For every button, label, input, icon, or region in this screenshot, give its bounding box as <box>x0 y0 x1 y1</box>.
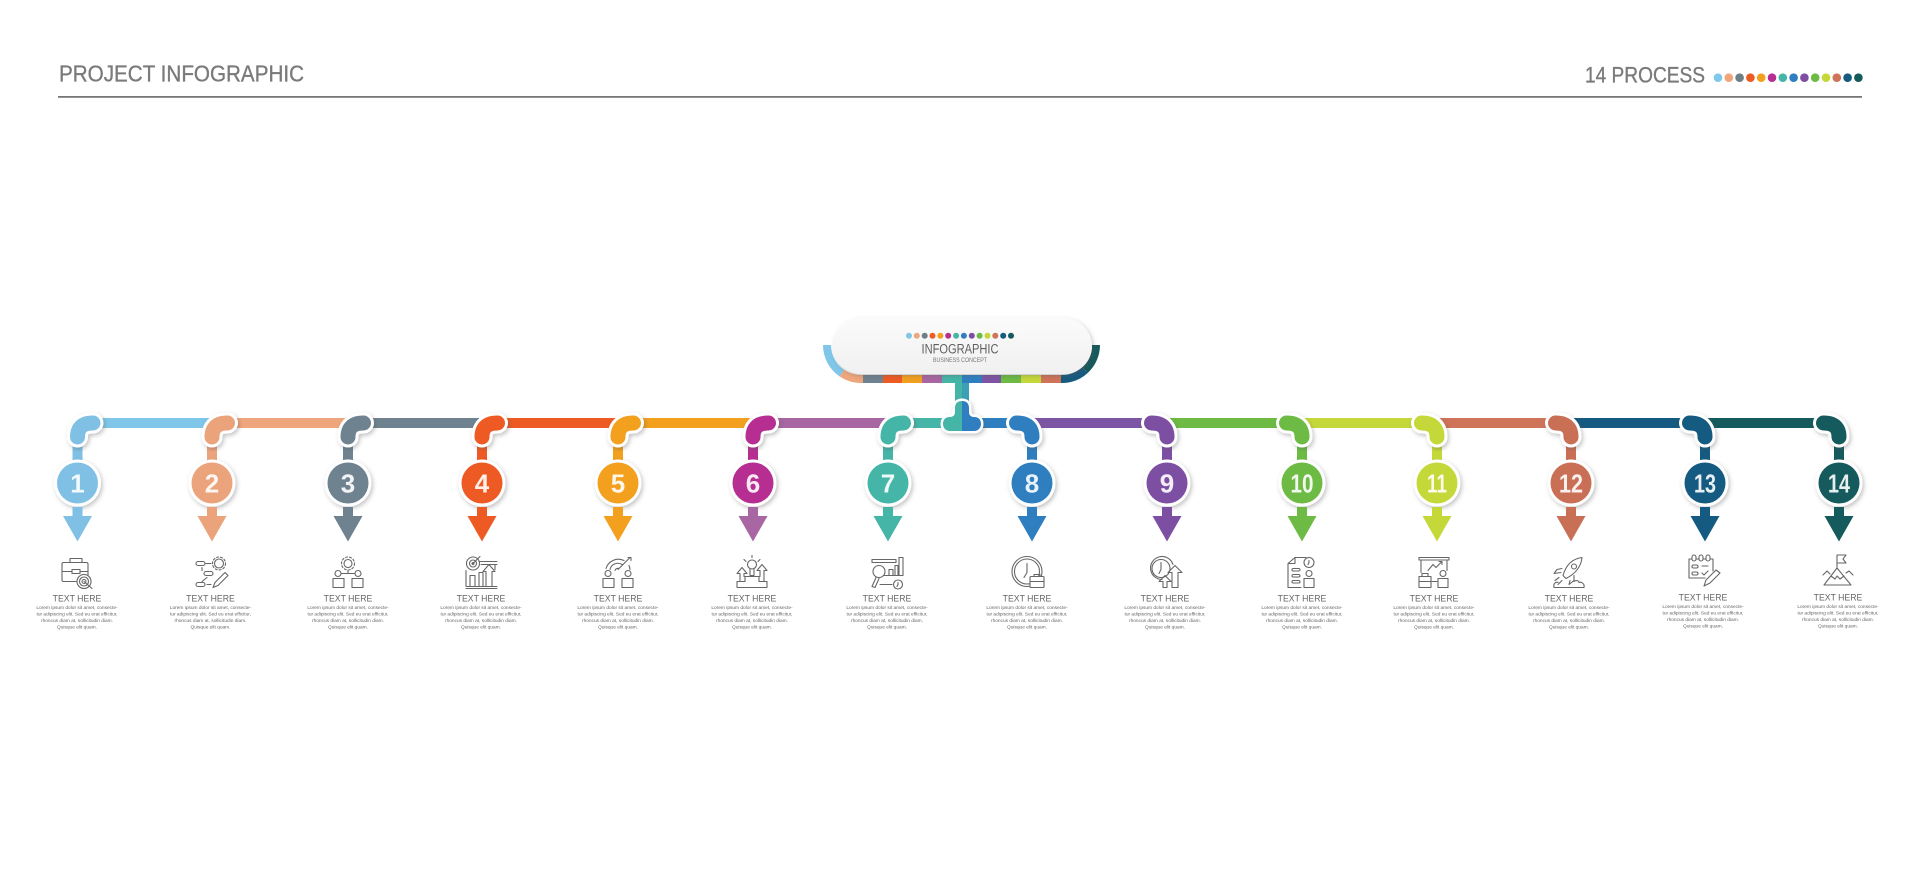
node 5 connector, badge and arrow <box>594 423 642 542</box>
node 14 connector, badge and arrow: 14 <box>1828 468 1850 498</box>
hub colour dots <box>906 333 1014 339</box>
label: TEXT HERE <box>1545 594 1593 604</box>
node 7 connector, badge and arrow: 7 <box>881 468 895 498</box>
node 2 connector, badge and arrow <box>188 423 236 542</box>
description: rhoncus diam at, sollicitudin diam. <box>991 618 1063 624</box>
description: rhoncus diam at, sollicitudin diam. <box>1266 618 1338 624</box>
icon: rocket <box>1554 558 1584 588</box>
description: rhoncus diam at, sollicitudin diam. <box>582 618 654 624</box>
description: Quisque elit quam. <box>598 624 638 630</box>
node 11 connector, badge and arrow: 11 <box>1427 468 1447 498</box>
description: tur adipiscing elit. Sed eu erat efficitur, <box>170 612 251 618</box>
node 14 connector, badge and arrow <box>1816 423 1862 542</box>
description: rhoncus diam at, sollicitudin diam. <box>41 618 113 624</box>
description: rhoncus diam at, sollicitudin diam. <box>1802 617 1874 623</box>
description: Quisque elit quam. <box>57 624 97 630</box>
icon: target and growth chart <box>466 556 497 588</box>
icon: document, clock and person <box>1288 558 1314 588</box>
node 13 connector, badge and arrow <box>1682 423 1728 542</box>
node 5 connector, badge and arrow: 5 <box>611 468 625 498</box>
node 12 connector, badge and arrow <box>1548 423 1594 542</box>
label: TEXT HERE <box>1814 592 1862 604</box>
step 9 <box>1124 423 1206 630</box>
description: Quisque elit quam. <box>1145 624 1185 630</box>
label: TEXT HERE <box>324 594 372 604</box>
description: tur adipiscing elit. Sed eu erat efficitur, <box>308 612 388 618</box>
description: Lorem ipsum dolor sit amet, consecte- <box>1393 605 1475 611</box>
step 12 <box>1528 423 1610 630</box>
node 10 connector, badge and arrow <box>1278 423 1326 542</box>
title: PROJECT INFOGRAPHIC <box>59 60 304 86</box>
node 9 connector, badge and arrow <box>1144 423 1190 542</box>
description: Lorem ipsum dolor sit amet, consecte- <box>711 605 793 611</box>
node 1 connector, badge and arrow <box>54 423 101 542</box>
horizontal connector bars <box>86 418 1831 428</box>
description: Lorem ipsum dolor sit amet, consecte- <box>1124 605 1206 611</box>
label: TEXT HERE <box>594 594 642 604</box>
icon: workflow and pencil <box>196 557 228 588</box>
step 11 <box>1393 423 1475 630</box>
step 14 <box>1797 423 1879 630</box>
description: tur adipiscing elit. Sed eu erat efficitur, <box>1798 611 1878 617</box>
step 8 <box>986 423 1068 630</box>
description: Quisque elit quam. <box>1818 624 1858 630</box>
description: Quisque elit quam. <box>190 624 230 630</box>
step 7 <box>846 423 928 630</box>
description: tur adipiscing elit. Sed eu erat efficitur, <box>1529 612 1609 618</box>
label: TEXT HERE <box>1003 594 1051 604</box>
header <box>58 60 1863 98</box>
description: Quisque elit quam. <box>867 624 907 630</box>
description: Quisque elit quam. <box>732 624 772 630</box>
description: tur adipiscing elit. Sed eu erat efficitur, <box>987 612 1067 618</box>
description: rhoncus diam at, sollicitudin diam. <box>1667 617 1739 623</box>
label: TEXT HERE <box>1410 594 1458 604</box>
description: rhoncus diam at, sollicitudin diam. <box>312 618 384 624</box>
description: Lorem ipsum dolor sit amet, consecte- <box>1662 604 1744 610</box>
hub heading: INFOGRAPHIC <box>922 342 999 356</box>
icon: analysis board and magnifier <box>872 558 903 589</box>
label: TEXT HERE <box>1278 594 1326 604</box>
description: Lorem ipsum dolor sit amet, consecte- <box>36 605 118 611</box>
description: rhoncus diam at, sollicitudin diam. <box>445 618 517 624</box>
node 10 connector, badge and arrow: 10 <box>1290 468 1314 498</box>
description: rhoncus diam at, sollicitudin diam. <box>1398 618 1470 624</box>
step 3 <box>307 423 389 630</box>
description: rhoncus diam at, sollicitudin diam. <box>851 618 923 624</box>
node 4 connector, badge and arrow <box>458 423 506 542</box>
trunk stem <box>955 378 969 404</box>
description: rhoncus diam at, sollicitudin diam. <box>174 618 246 624</box>
icon: team and gear <box>333 557 363 588</box>
node 3 connector, badge and arrow <box>324 423 372 542</box>
icon: flag on mountain <box>1823 555 1853 585</box>
icon: idea and rising podium <box>737 556 767 588</box>
node 1 connector, badge and arrow: 1 <box>70 468 85 498</box>
label: TEXT HERE <box>728 594 776 604</box>
description: Lorem ipsum dolor sit amet, consecte- <box>846 605 928 611</box>
icon: team aiming at target <box>603 558 633 588</box>
step 6 <box>711 423 793 630</box>
icon: clock and briefcase <box>1012 556 1044 588</box>
description: rhoncus diam at, sollicitudin diam. <box>1533 618 1605 624</box>
label: TEXT HERE <box>53 594 101 604</box>
description: Lorem ipsum dolor sit amet, consecte- <box>1261 605 1343 611</box>
icon: calendar and pencil <box>1689 555 1720 586</box>
description: tur adipiscing elit. Sed eu erat efficitur, <box>1394 612 1474 618</box>
node 8 connector, badge and arrow <box>1008 423 1056 542</box>
hub panel <box>833 318 1092 374</box>
node 6 connector, badge and arrow: 6 <box>746 468 760 498</box>
node 11 connector, badge and arrow <box>1414 423 1460 542</box>
description: tur adipiscing elit. Sed eu erat efficitur, <box>1663 611 1743 617</box>
node 2 connector, badge and arrow: 2 <box>205 468 219 498</box>
node 8 connector, badge and arrow: 8 <box>1025 468 1039 498</box>
node 12 connector, badge and arrow: 12 <box>1559 468 1583 498</box>
node 4 connector, badge and arrow: 4 <box>475 468 490 498</box>
description: Lorem ipsum dolor sit amet, consecte- <box>170 605 252 611</box>
description: tur adipiscing elit. Sed eu erat efficitur, <box>1262 612 1342 618</box>
description: tur adipiscing elit. Sed eu erat efficitur, <box>37 612 117 618</box>
description: Lorem ipsum dolor sit amet, consecte- <box>577 605 659 611</box>
step 4 <box>440 423 522 630</box>
description: tur adipiscing elit. Sed eu erat efficitur, <box>847 612 927 618</box>
description: Quisque elit quam. <box>1414 624 1454 630</box>
label: TEXT HERE <box>1141 594 1189 604</box>
label: TEXT HERE <box>457 594 505 604</box>
icon: clock and rising arrows <box>1151 557 1182 588</box>
description: Lorem ipsum dolor sit amet, consecte- <box>1528 605 1610 611</box>
node 6 connector, badge and arrow <box>730 423 776 542</box>
description: rhoncus diam at, sollicitudin diam. <box>1129 618 1201 624</box>
central hub <box>827 318 1096 431</box>
hub subheading: BUSINESS CONCEPT <box>933 357 987 364</box>
step 10 <box>1261 423 1343 630</box>
description: Quisque elit quam. <box>1007 624 1047 630</box>
node 7 connector, badge and arrow <box>864 423 912 542</box>
description: Lorem ipsum dolor sit amet, consecte- <box>1797 604 1879 610</box>
description: Quisque elit quam. <box>1549 624 1589 630</box>
description: tur adipiscing elit. Sed eu erat efficitur, <box>441 612 521 618</box>
label: TEXT HERE <box>186 594 235 604</box>
description: tur adipiscing elit. Sed eu erat efficitur, <box>1125 612 1205 618</box>
step 5 <box>577 423 659 630</box>
description: Lorem ipsum dolor sit amet, consecte- <box>307 605 389 611</box>
description: Quisque elit quam. <box>1282 624 1322 630</box>
description: Lorem ipsum dolor sit amet, consecte- <box>440 605 522 611</box>
step 1 <box>36 423 118 630</box>
label: TEXT HERE <box>863 594 911 604</box>
description: Quisque elit quam. <box>328 624 368 630</box>
step 13 <box>1662 423 1744 630</box>
node 9 connector, badge and arrow: 9 <box>1160 468 1174 498</box>
process count label: 14 PROCESS <box>1585 62 1705 88</box>
T junction <box>943 401 981 431</box>
description: Quisque elit quam. <box>1683 624 1723 630</box>
description: Quisque elit quam. <box>461 624 501 630</box>
description: tur adipiscing elit. Sed eu erat efficitur, <box>712 612 792 618</box>
step 2 <box>170 423 252 630</box>
label: TEXT HERE <box>1679 592 1727 604</box>
node 3 connector, badge and arrow: 3 <box>341 468 355 498</box>
description: rhoncus diam at, sollicitudin diam. <box>716 618 788 624</box>
header colour dots <box>1714 73 1863 82</box>
colour band under hub <box>827 345 1096 379</box>
description: Lorem ipsum dolor sit amet, consecte- <box>986 605 1068 611</box>
description: tur adipiscing elit. Sed eu erat efficitur, <box>578 612 658 618</box>
icon: presentation board <box>1419 558 1449 588</box>
node 13 connector, badge and arrow: 13 <box>1694 468 1716 498</box>
icon: briefcase and target <box>62 558 92 588</box>
